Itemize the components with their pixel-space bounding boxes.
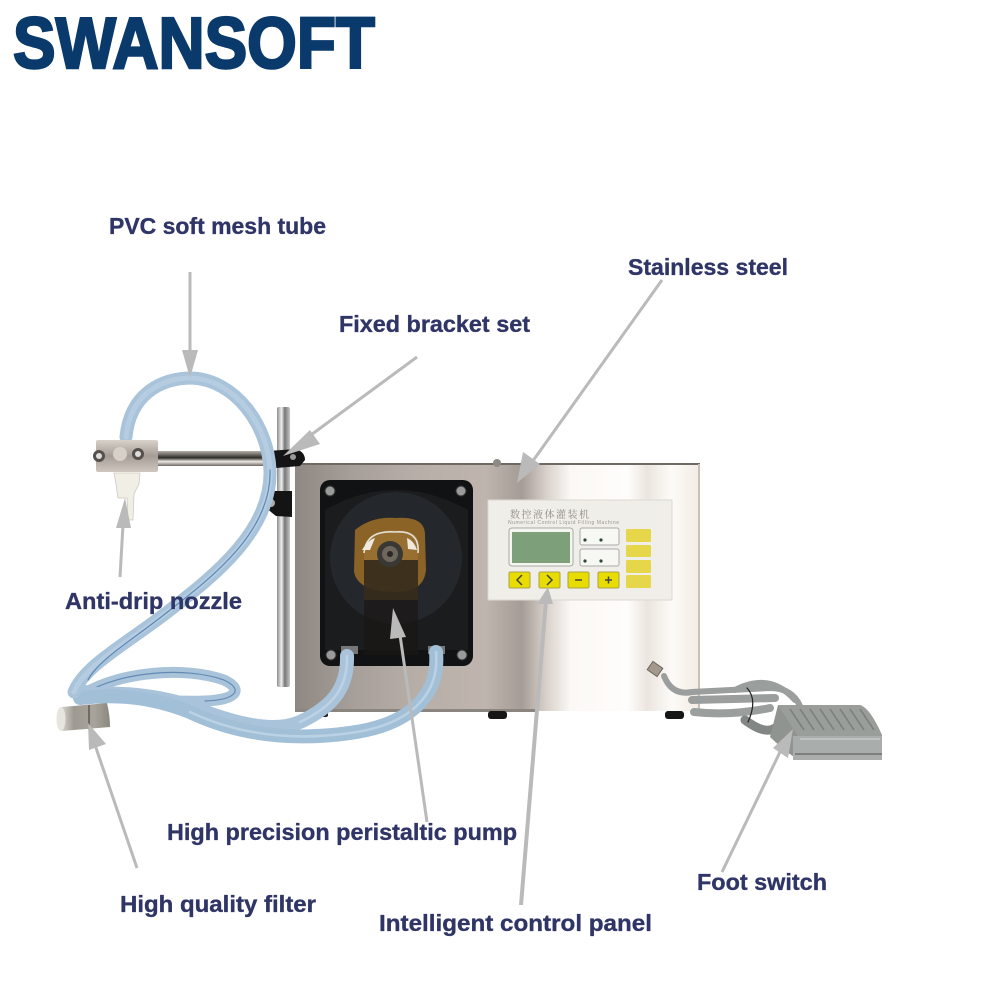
- control panel: 数控液体灌装机: [510, 508, 590, 521]
- vertical support rod: [277, 407, 290, 687]
- arrow: stainless steel: [517, 280, 662, 483]
- fixed bracket: [264, 449, 305, 517]
- arrow: foot switch: [722, 729, 793, 872]
- label: High quality filter: High quality filter: [120, 891, 316, 917]
- steel machine body: [295, 459, 700, 719]
- anti-drip nozzle tip: [114, 473, 140, 520]
- label: Fixed bracket set: Fixed bracket set: [339, 311, 530, 337]
- arrow: control panel: [521, 587, 553, 905]
- arrow: fixed bracket set: [283, 357, 417, 456]
- filter: [56, 703, 110, 731]
- peristaltic pump head: [320, 480, 473, 666]
- control panel: [488, 500, 672, 600]
- nozzle manifold block: [93, 440, 158, 520]
- arrow: peristaltic pump: [390, 608, 427, 822]
- pvc mesh tube: [74, 378, 436, 736]
- logo: SWANSOFT: SWANSOFT: [13, 3, 375, 84]
- arrow: anti-drip nozzle: [116, 498, 131, 577]
- label: Anti-drip nozzle: Anti-drip nozzle: [65, 588, 242, 614]
- label: Foot switch: Foot switch: [697, 869, 827, 895]
- label: Stainless steel: Stainless steel: [628, 254, 788, 280]
- label: High precision peristaltic pump: High precision peristaltic pump: [167, 819, 517, 845]
- arrow: high quality filter: [88, 723, 137, 868]
- label: Intelligent control panel: Intelligent control panel: [379, 910, 652, 936]
- control panel: Numerical Control Liquid Filling Machine: [508, 520, 619, 526]
- foot switch cable: [647, 661, 800, 730]
- arrow: PVC soft mesh tube: [182, 272, 198, 378]
- horizontal nozzle support bar: [158, 451, 276, 466]
- label: PVC soft mesh tube: PVC soft mesh tube: [109, 213, 326, 239]
- machine: filling machine photo illustration: [56, 378, 882, 760]
- foot switch pedal: [770, 705, 882, 760]
